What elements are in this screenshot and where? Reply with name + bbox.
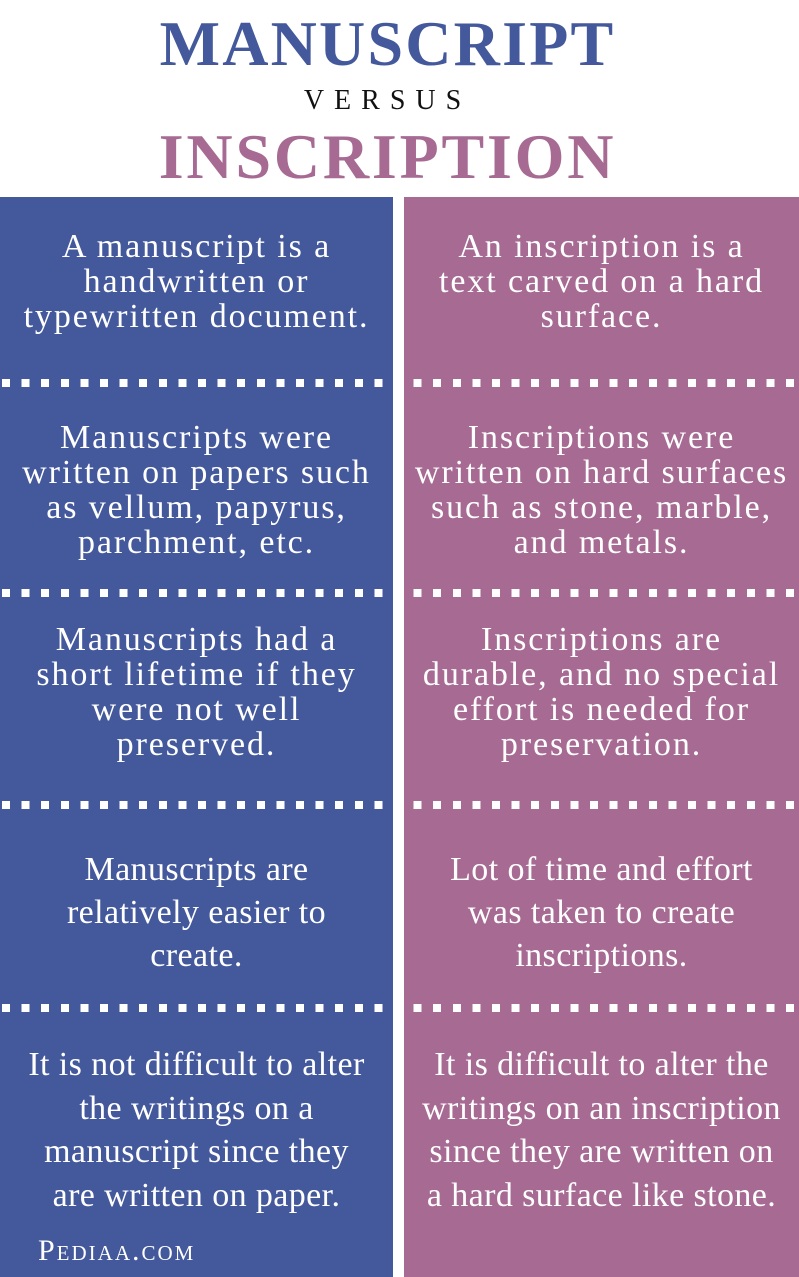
text: manuscript creation: Manuscripts are [84, 851, 309, 888]
text: inscription alteration: a hard surface like stone. [427, 1176, 776, 1214]
text: inscription material [414, 419, 788, 561]
text: inscription alteration: writings on an inscription [422, 1090, 781, 1126]
text: manuscript alteration: are written on paper. [53, 1176, 340, 1214]
text: inscription definition [439, 228, 764, 335]
text: inscription definition: text carved on a hard [439, 263, 764, 300]
text: manuscript alteration: the writings on a [79, 1090, 314, 1126]
text: manuscript lifetime: were not well [92, 691, 301, 728]
text: inscription definition: surface. [541, 298, 662, 335]
text: manuscript alteration: It is not difficult to alter [28, 1046, 365, 1083]
text: manuscript lifetime: short lifetime if they [36, 656, 357, 693]
text: inscription creation [450, 851, 753, 974]
text: inscription creation: Lot of time and effort [450, 851, 753, 888]
subtitle: versus: VERSUS [304, 85, 471, 116]
text: manuscript lifetime [36, 621, 357, 763]
text: manuscript lifetime: Manuscripts had a [56, 621, 337, 658]
text: manuscript lifetime: preserved. [117, 726, 276, 763]
panel: manuscript column [0, 197, 393, 1277]
text: manuscript creation: create. [150, 937, 243, 974]
text: manuscript definition: typewritten document. [24, 298, 369, 335]
text: manuscript material: as vellum, papyrus, [46, 489, 347, 526]
text: inscription definition: An inscription is a [458, 228, 745, 265]
text: manuscript definition: A manuscript is a [62, 228, 331, 265]
text: manuscript alteration [28, 1046, 365, 1214]
text: inscription alteration: It is difficult to alter the [434, 1046, 769, 1083]
text: manuscript creation: relatively easier to [67, 894, 326, 931]
text: inscription alteration [422, 1046, 781, 1214]
text: inscription material: Inscriptions were [468, 419, 735, 456]
text: manuscript material [22, 419, 371, 561]
text: inscription material: and metals. [514, 524, 689, 561]
text: inscription creation: was taken to create [468, 894, 735, 931]
text: inscription lifetime: durable, and no special [423, 656, 780, 693]
text: inscription lifetime: preservation. [501, 726, 702, 763]
footer: pediaa.com: Pediaa.com [38, 1234, 195, 1267]
text: manuscript creation [67, 851, 326, 974]
text: manuscript material: Manuscripts were [60, 419, 333, 456]
title: inscription: INSCRIPTION [159, 121, 616, 192]
text: inscription lifetime [423, 621, 780, 763]
text: manuscript alteration: manuscript since they [44, 1133, 349, 1170]
text: inscription lifetime: effort is needed for [453, 691, 750, 728]
text: inscription material: such as stone, marble, [431, 489, 772, 526]
text: inscription lifetime: Inscriptions are [481, 621, 722, 658]
title: manuscript: MANUSCRIPT [160, 8, 615, 79]
text: manuscript definition [24, 228, 369, 335]
text: manuscript material: parchment, etc. [78, 524, 315, 561]
panel: inscription column [404, 197, 799, 1277]
text: inscription creation: inscriptions. [515, 937, 688, 974]
text: inscription alteration: since they are written on [429, 1133, 774, 1170]
text: manuscript material: written on papers such [22, 454, 371, 491]
divider dots [0, 379, 799, 387]
text: inscription material: written on hard surfaces [415, 454, 788, 491]
text: manuscript definition: handwritten or [84, 263, 309, 300]
